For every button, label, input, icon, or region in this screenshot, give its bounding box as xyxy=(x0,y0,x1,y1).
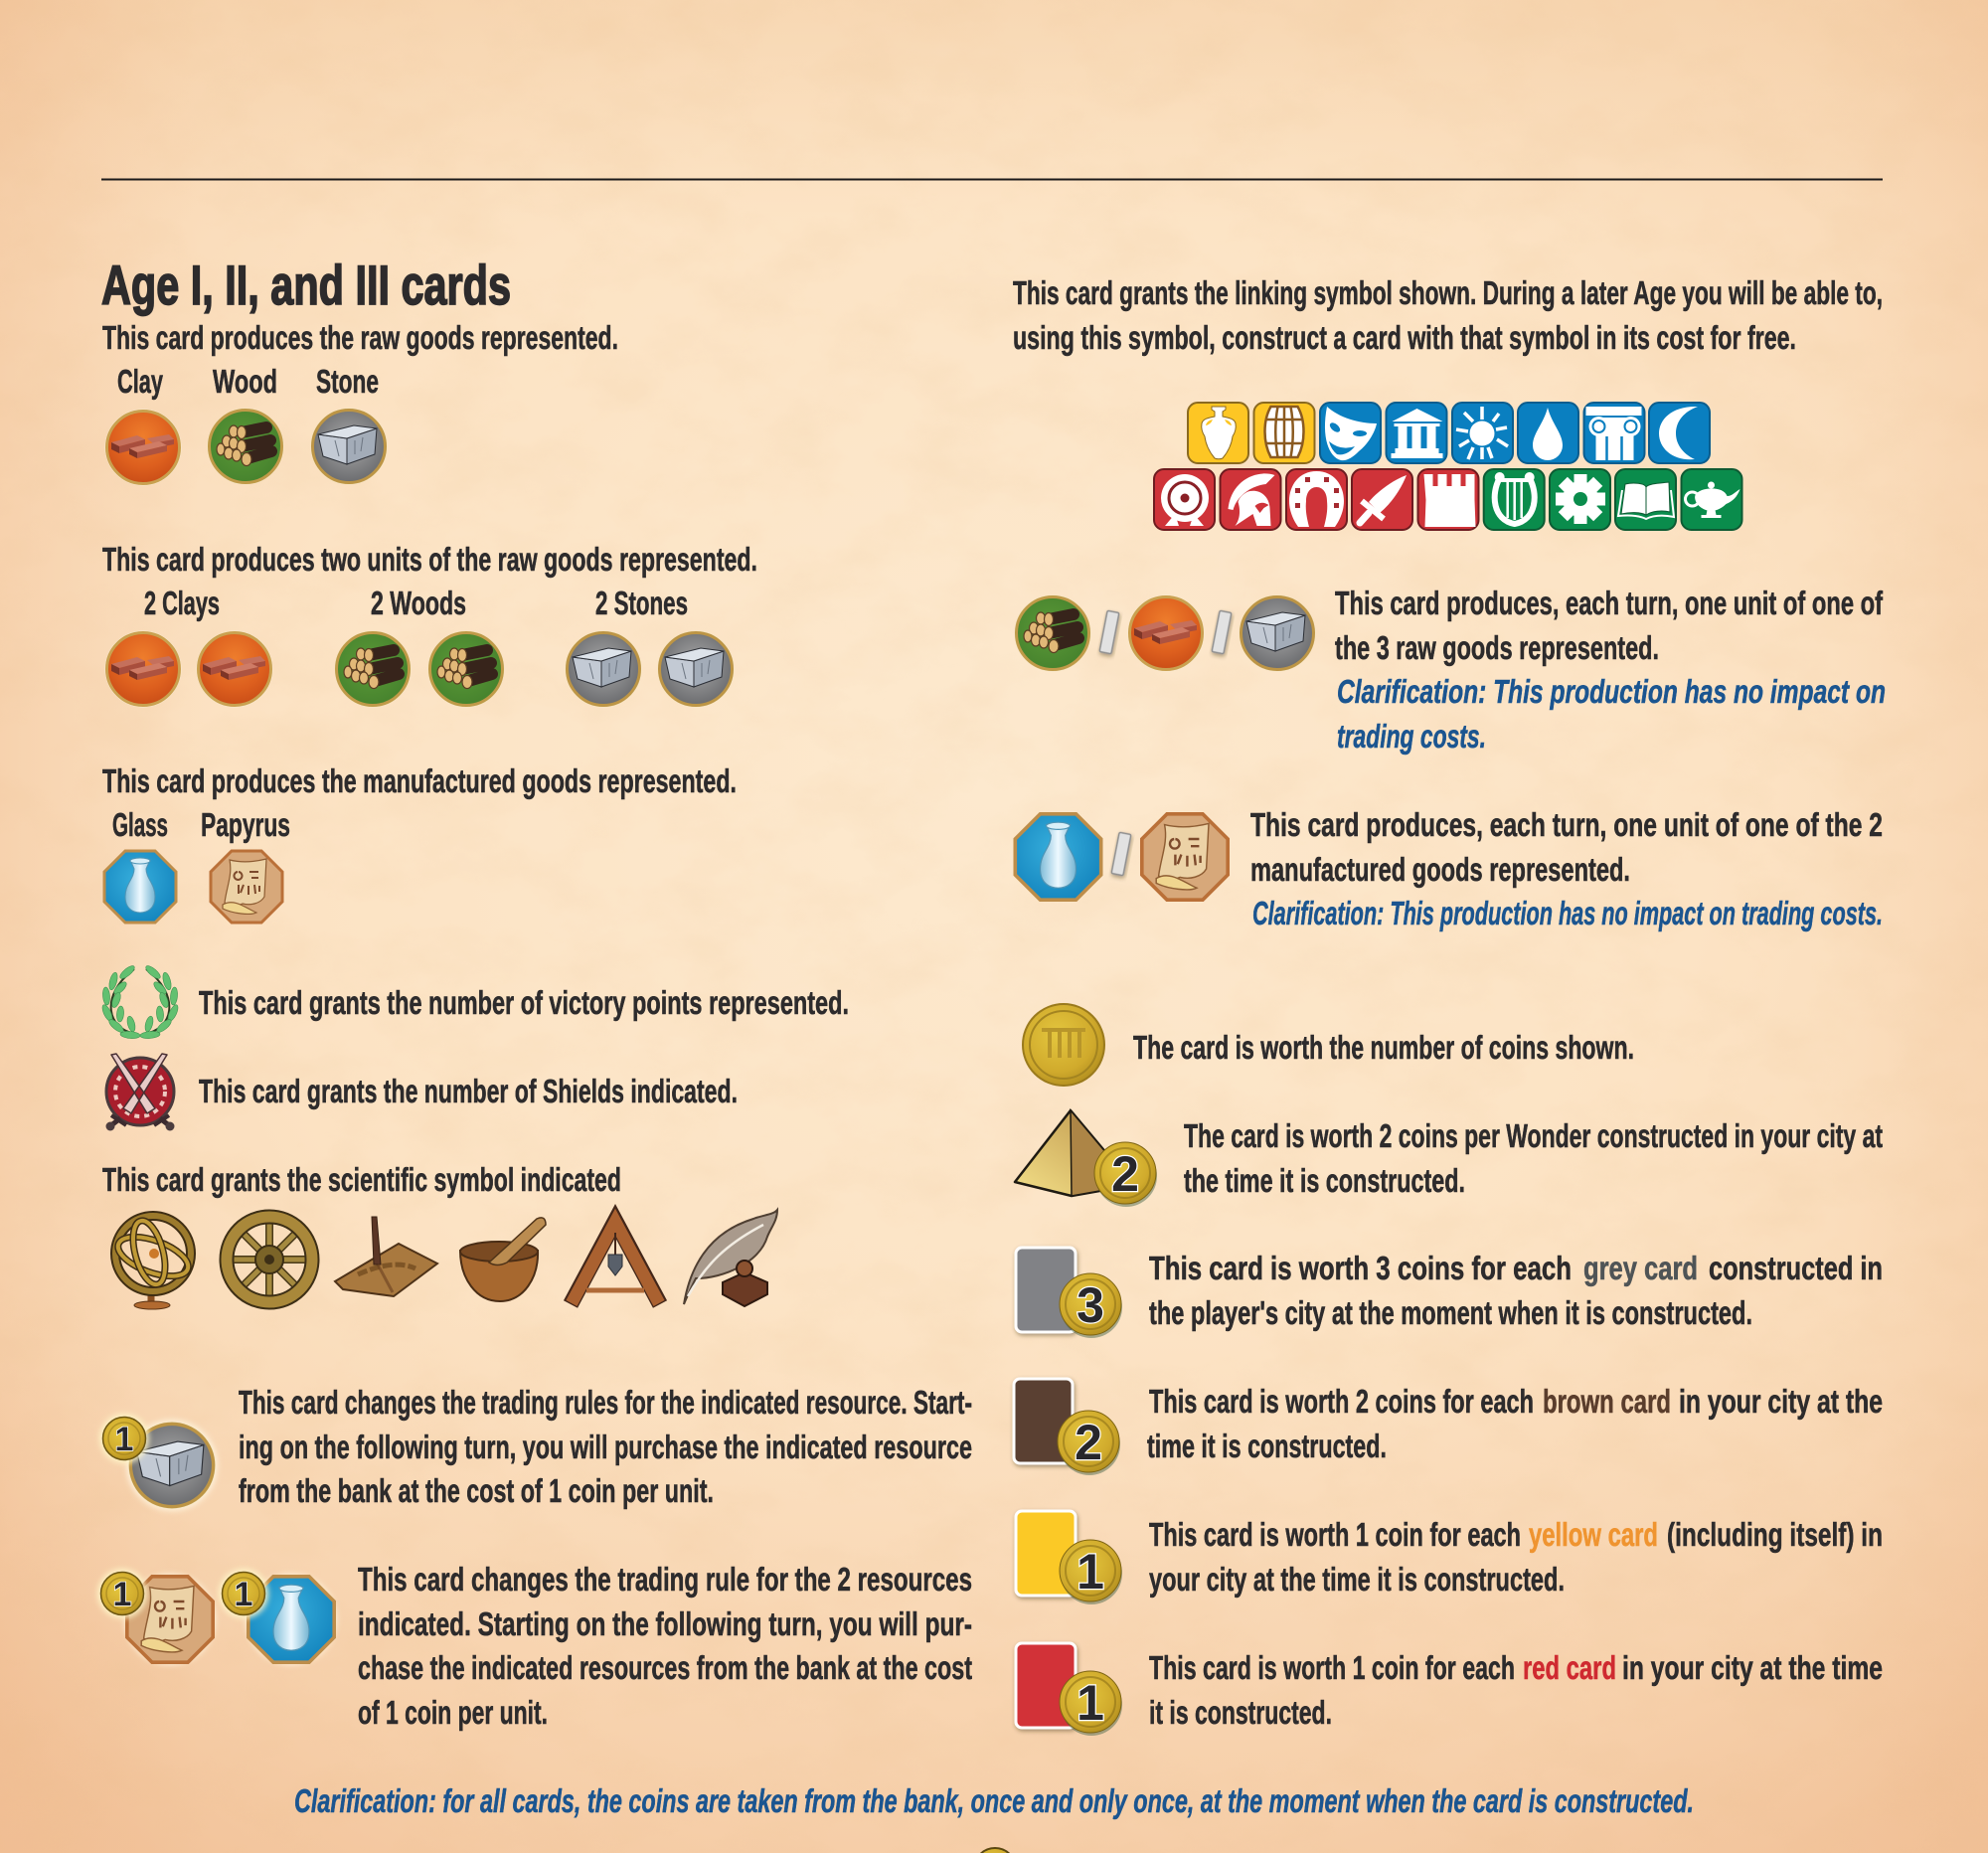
icons: glass / papyrus xyxy=(1015,814,1228,900)
text: two units: This card produces two units of the raw goods represented. xyxy=(102,541,757,578)
icon: papyrus and glass with coins xyxy=(97,1569,337,1665)
panel: trading rule for two resources xyxy=(97,1561,972,1731)
icon: amphora xyxy=(1188,403,1248,463)
labels: 2 clays 2 woods 2 stones: 2 Stones xyxy=(595,585,688,621)
icon: brown card with 2 coin: 2 xyxy=(1075,1415,1102,1470)
icons: linking symbols row 2 xyxy=(1154,469,1741,530)
icon: ionic column xyxy=(1584,403,1644,463)
icon: tower xyxy=(1417,469,1479,530)
text: yellow card: This card is worth 1 coin for each xyxy=(1149,1516,1521,1553)
text: one-resource trading rule xyxy=(239,1384,972,1509)
top rule xyxy=(101,179,1883,181)
icon: coin cut off at the bottom edge xyxy=(974,1848,1016,1853)
icon: horseshoe xyxy=(1286,469,1347,530)
panel: trading rule for one resource xyxy=(99,1384,972,1511)
icon: set square with plumb xyxy=(571,1221,660,1304)
panel: manufactured goods xyxy=(102,762,737,923)
panel: raw goods xyxy=(102,319,618,485)
icon: mortar and pestle xyxy=(460,1218,546,1301)
panel: one of two manufactured goods xyxy=(1015,806,1883,931)
text: two-resource trading rule xyxy=(358,1561,972,1731)
text: one-resource trading rule: from the bank at the cost of 1 coin per unit. xyxy=(239,1472,714,1509)
labels: 2 clays 2 woods 2 stones xyxy=(144,585,688,621)
icon: quill and ink xyxy=(684,1210,777,1306)
text: one of three raw goods: the 3 raw goods represented. xyxy=(1335,629,1659,666)
text: red card: in your city at the time xyxy=(1622,1649,1883,1686)
text: manufactured goods: This card produces the manufactured goods represented. xyxy=(102,762,737,799)
text: grey card xyxy=(1149,1250,1883,1331)
text: per wonder xyxy=(1184,1117,1883,1199)
text: brown card: time it is constructed. xyxy=(1147,1428,1387,1464)
icon: yellow card with 1 coin xyxy=(1016,1511,1122,1604)
text: grey card: the player's city at the moment when it is constructed. xyxy=(1149,1294,1752,1331)
icon: stone with 1 coin xyxy=(99,1414,218,1511)
text: one of three raw goods xyxy=(1335,585,1884,666)
icon: pyramid with 2 coin: 2 xyxy=(1111,1146,1139,1202)
text: one of two manufactured goods: manufactured goods represented. xyxy=(1250,851,1630,888)
icon: wheel xyxy=(226,1216,313,1303)
text: scientific symbol: This card grants the scientific symbol indicated xyxy=(102,1161,621,1198)
text: brown card: brown card xyxy=(1543,1383,1671,1420)
text: two-resource trading rule: of 1 coin per unit. xyxy=(358,1694,548,1731)
labels: clay wood stone: Wood xyxy=(213,363,277,400)
text: two-resource trading rule: This card changes the trading rule for the 2 resources xyxy=(358,1561,972,1598)
icon: red card with 1 coin: 1 xyxy=(1077,1675,1104,1731)
icons: science symbols xyxy=(113,1210,777,1309)
icon: theatre mask xyxy=(1320,403,1381,463)
icon: lyre xyxy=(1484,469,1545,530)
heading: Age I, II, and III cards: Age I, II, and III cards xyxy=(101,253,511,316)
text: red card: red card xyxy=(1523,1649,1616,1686)
text: red card xyxy=(1149,1649,1883,1731)
text: one-resource trading rule: ing on the following turn, you will purchase the indicated resource xyxy=(239,1429,972,1465)
icon: oil lamp xyxy=(1682,469,1741,530)
text: red card: This card is worth 1 coin for each xyxy=(1149,1649,1515,1686)
icon: sword xyxy=(1352,469,1412,530)
icon: grey card with 3 coin: 3 xyxy=(1077,1277,1104,1333)
icons: double resources xyxy=(105,630,734,708)
text: yellow card xyxy=(1149,1516,1883,1598)
labels: clay wood stone: Clay xyxy=(117,363,163,400)
icon: temple xyxy=(1386,403,1447,463)
labels: glass papyrus: Papyrus xyxy=(201,806,290,843)
labels: glass papyrus: Glass xyxy=(112,806,168,843)
icon: sundial xyxy=(335,1217,437,1296)
text: linking symbol xyxy=(1013,274,1883,356)
text: yellow card: (including itself) in xyxy=(1667,1516,1883,1553)
text: brown card: This card is worth 2 coins for each xyxy=(1149,1383,1534,1420)
clarification: trading costs xyxy=(1337,673,1886,755)
panel: two units of raw goods xyxy=(102,541,757,708)
icon: barrel xyxy=(1254,403,1314,463)
text: yellow card: yellow card xyxy=(1529,1516,1658,1553)
icon: brown card with 2 coin xyxy=(1014,1379,1120,1475)
icons: clay wood stone xyxy=(105,408,388,485)
text: shields: This card grants the number of Shields indicated. xyxy=(199,1073,738,1109)
text: brown card xyxy=(1147,1383,1883,1464)
text: brown card: in your city at the xyxy=(1679,1383,1883,1420)
text: one of two manufactured goods xyxy=(1250,806,1883,888)
icons: linking symbols row 1 xyxy=(1188,403,1710,463)
labels: 2 clays 2 woods 2 stones: 2 Clays xyxy=(144,585,220,621)
labels: clay wood stone xyxy=(117,363,379,400)
text: one-resource trading rule: This card changes the trading rules for the indicated resource. Start- xyxy=(239,1384,972,1421)
icons: glass papyrus xyxy=(104,851,282,923)
labels: glass papyrus xyxy=(112,806,290,843)
icon: shield with crossed swords xyxy=(105,1054,175,1131)
icon: water drop xyxy=(1518,403,1578,463)
text: yellow card: your city at the time it is constructed. xyxy=(1149,1561,1565,1598)
labels: 2 clays 2 woods 2 stones: 2 Woods xyxy=(371,585,466,621)
text: grey card: constructed in xyxy=(1709,1250,1883,1286)
text: victory points: This card grants the number of victory points represented. xyxy=(199,984,849,1021)
icon: crescent moon xyxy=(1649,403,1710,463)
icons: wood / clay / stone xyxy=(1014,594,1316,672)
icon: pyramid with 2 coin xyxy=(1015,1110,1157,1207)
text: per wonder: the time it is constructed. xyxy=(1184,1162,1465,1199)
icon: grey card with 3 coin xyxy=(1016,1248,1122,1338)
labels: clay wood stone: Stone xyxy=(316,363,379,400)
text: two-resource trading rule: indicated. Starting on the following turn, you will pur- xyxy=(358,1605,972,1642)
icon: yellow card with 1 coin: 1 xyxy=(1077,1544,1104,1600)
icon: red card with 1 coin xyxy=(1016,1643,1122,1736)
icon: target xyxy=(1154,469,1215,530)
icon: sun xyxy=(1452,403,1513,463)
icon: open book xyxy=(1615,469,1676,530)
icon: gear xyxy=(1550,469,1610,530)
icon: laurel wreath xyxy=(100,964,180,1039)
text: two-resource trading rule: chase the indicated resources from the bank at the cost xyxy=(358,1649,972,1686)
text: raw goods: This card produces the raw goods represented. xyxy=(102,319,618,356)
text: grey card: grey card xyxy=(1583,1250,1698,1286)
clarification: trading costs: trading costs. xyxy=(1337,718,1486,755)
icon: armillary sphere xyxy=(113,1216,193,1309)
panel: one of three raw goods xyxy=(1014,585,1886,755)
text: coins shown: The card is worth the number of coins shown. xyxy=(1133,1029,1634,1066)
icon: gold coin xyxy=(1023,1004,1104,1086)
text: grey card: This card is worth 3 coins for each xyxy=(1149,1250,1572,1286)
text: red card: it is constructed. xyxy=(1149,1694,1332,1731)
icon: helmet xyxy=(1221,469,1280,530)
